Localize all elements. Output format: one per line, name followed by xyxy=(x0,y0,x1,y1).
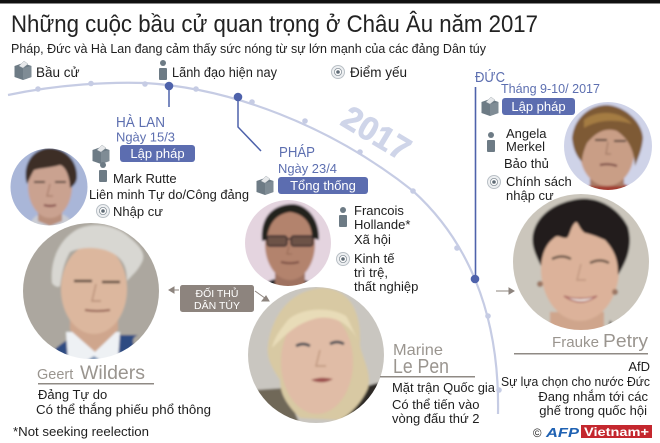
footnote: *Not seeking reelection xyxy=(13,424,149,439)
name: Geert Wilders xyxy=(37,363,154,384)
details: Marine Le Pen: vòng đấu thứ 2 xyxy=(392,411,480,426)
name: Frauke Petry: Petry xyxy=(603,331,648,351)
details: Geert Wilders xyxy=(36,387,211,417)
arrow to Le Pen xyxy=(255,291,269,301)
name: Frauke Petry: Frauke xyxy=(552,334,599,351)
panel: Germany xyxy=(475,69,600,203)
leader icon xyxy=(487,132,495,152)
leader details xyxy=(354,203,418,294)
ballot icon xyxy=(256,176,274,195)
type badge: Lập pháp xyxy=(511,99,566,114)
subtitle: Pháp, Đức và Hà Lan đang cảm thấy sức nóng từ sự lớn mạnh của các đảng Dân túy xyxy=(11,41,486,56)
top black bar xyxy=(0,0,660,4)
timeline arc xyxy=(8,81,502,414)
callout: populist rivals: DÂN TÚY xyxy=(194,299,240,312)
details: Marine Le Pen: Mặt trận Quốc gia xyxy=(392,380,496,395)
ballot icon xyxy=(92,145,110,164)
logo: AFP Vietnam+ xyxy=(533,425,652,440)
details: Frauke Petry: Đang nhắm tới các xyxy=(538,389,648,404)
legend label: weak point: Điểm yếu xyxy=(350,65,407,80)
weak point icon xyxy=(488,176,500,188)
leader details: Merkel xyxy=(506,139,545,154)
details: Marine Le Pen xyxy=(392,380,496,426)
type badge xyxy=(278,177,368,194)
country heading: HÀ LAN xyxy=(116,114,165,131)
details: Geert Wilders: Có thể thắng phiếu phổ thông xyxy=(36,402,211,417)
ballot icon xyxy=(482,97,498,116)
portrait: Francois Hollande xyxy=(245,200,331,286)
portrait: Frauke Petry xyxy=(511,192,651,334)
date: Ngày 23/4 xyxy=(278,162,337,176)
name: Marine Le Pen: Le Pen xyxy=(393,356,449,378)
details: Frauke Petry: AfD xyxy=(628,359,650,374)
leader details: Francois xyxy=(354,203,404,218)
logo: AFP Vietnam+: AFP xyxy=(545,425,579,440)
portrait: Mark Rutte xyxy=(10,148,88,226)
leader details: Nhập cư xyxy=(113,204,163,219)
details: Geert Wilders: Đảng Tự do xyxy=(38,387,107,402)
legend label: leader: Lãnh đạo hiện nay xyxy=(172,65,277,80)
date: Tháng 9-10/ 2017 xyxy=(501,82,600,96)
details: Marine Le Pen: Có thể tiến vào xyxy=(392,397,479,412)
name: Frauke Petry xyxy=(514,331,648,354)
leader details: Chính sách xyxy=(506,174,572,189)
leader icon xyxy=(339,207,347,227)
marker: France xyxy=(234,93,261,151)
details: Frauke Petry: Sự lựa chọn cho nước Đức xyxy=(501,374,650,389)
arrow to Wilders xyxy=(169,287,179,293)
leader details xyxy=(89,171,249,219)
name: Marine Le Pen: Marine xyxy=(393,342,443,359)
portrait: Angela Merkel xyxy=(562,100,654,192)
leader details xyxy=(504,126,572,203)
marker: Germany xyxy=(471,87,479,283)
country heading: PHÁP xyxy=(279,144,315,161)
legend label: election: Bầu cử xyxy=(36,65,80,80)
leader details: Liên minh Tự do/Công đảng xyxy=(89,187,249,202)
legend: weak point icon xyxy=(332,66,344,78)
leader details: thất nghiệp xyxy=(354,279,418,294)
portrait: Geert Wilders xyxy=(21,221,161,361)
leader details: Mark Rutte xyxy=(113,171,177,186)
legend: leader icon xyxy=(159,60,167,80)
marker: Netherlands xyxy=(165,82,173,107)
weak point icon xyxy=(96,204,110,218)
leader details: trì trệ, xyxy=(354,265,388,280)
details: Frauke Petry: ghế trong quốc hội xyxy=(539,403,647,418)
callout: populist rivals: ĐỐI THỦ xyxy=(196,286,238,300)
type badge xyxy=(120,145,195,162)
legend xyxy=(14,60,407,80)
arrow to Petry xyxy=(496,288,514,294)
callout: populist rivals xyxy=(169,285,269,312)
portrait: Marine Le Pen xyxy=(246,285,386,425)
logo: AFP Vietnam+: Vietnam+ xyxy=(584,427,649,439)
name: Marine Le Pen xyxy=(380,342,475,378)
country heading: ĐỨC xyxy=(475,69,505,86)
leader details: Hollande* xyxy=(354,217,410,232)
logo: AFP Vietnam+: © xyxy=(533,428,542,440)
date: Ngày 15/3 xyxy=(116,130,175,144)
details: Frauke Petry xyxy=(501,359,650,418)
leader details: Bảo thủ xyxy=(504,156,549,171)
title: Những cuộc bầu cử quan trọng ở Châu Âu năm 2017 xyxy=(11,11,538,38)
panel: Netherlands xyxy=(89,114,249,219)
name: Geert Wilders: Geert xyxy=(37,367,73,383)
leader details: Kinh tế xyxy=(354,251,395,266)
type badge: Lập pháp xyxy=(130,146,185,161)
leader details: Xã hội xyxy=(354,232,391,247)
type badge: Tổng thống xyxy=(290,178,356,193)
name: Geert Wilders: Wilders xyxy=(80,363,145,384)
legend: ballot box xyxy=(14,61,32,80)
year label 2017: 2017 xyxy=(335,98,417,168)
leader details: nhập cư xyxy=(506,188,554,203)
panel: France xyxy=(256,144,418,294)
leader details: Angela xyxy=(506,126,547,141)
weak point icon xyxy=(336,252,350,266)
leader icon xyxy=(99,162,107,182)
